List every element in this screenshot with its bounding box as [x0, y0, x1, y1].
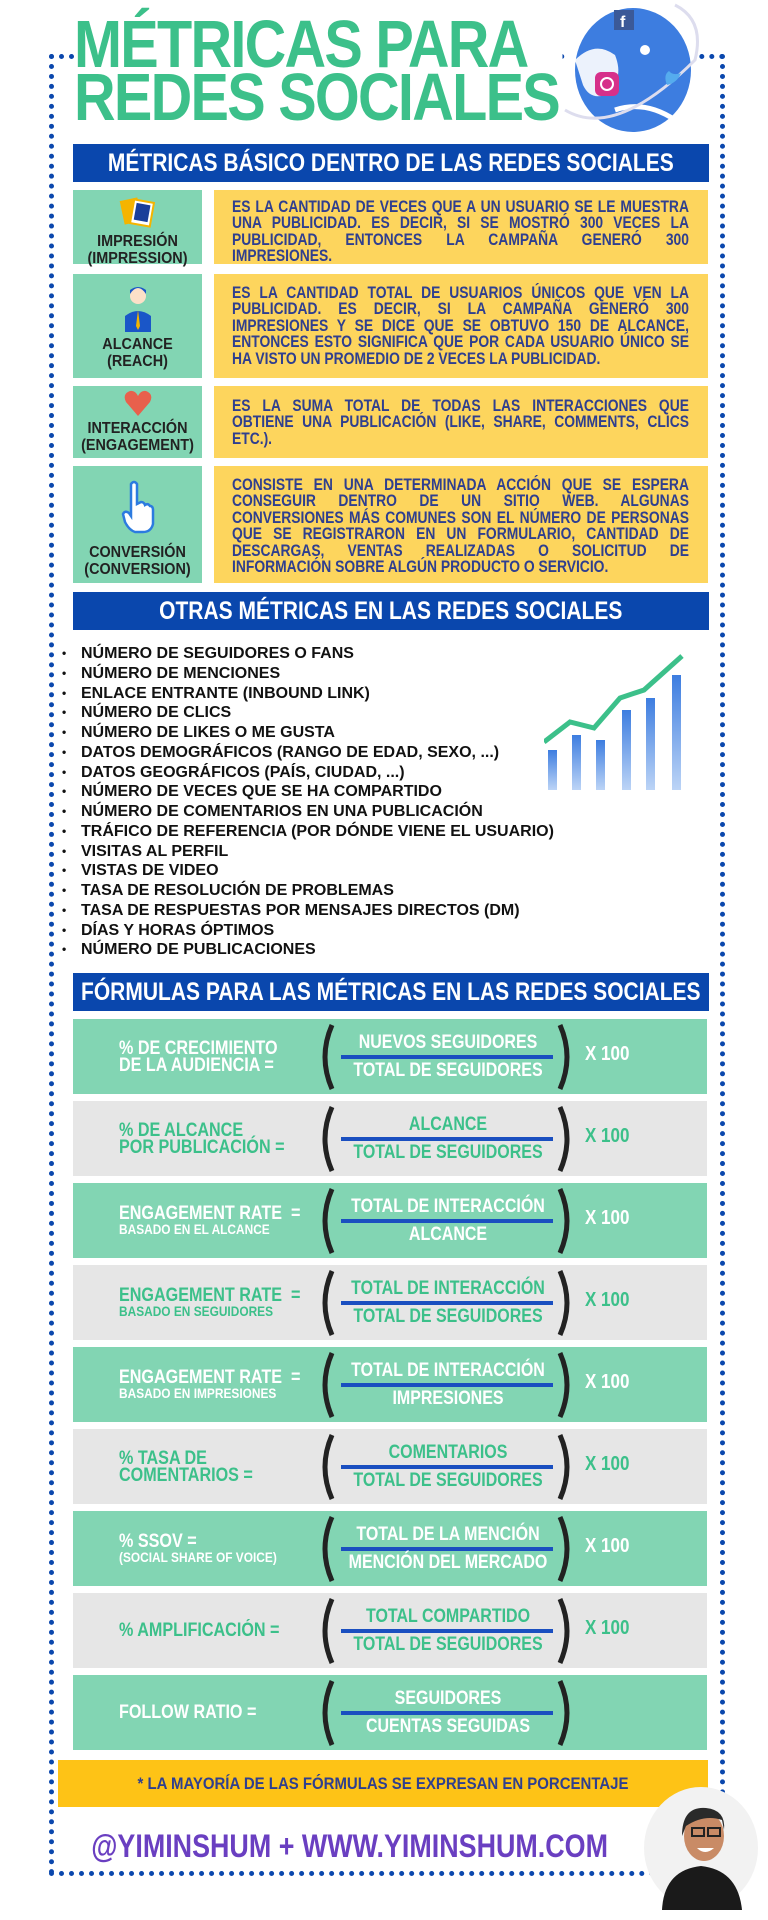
formula: follow ratio: FOLLOW RATIO =	[119, 1702, 256, 1723]
formula: follow ratio: CUENTAS SEGUIDAS	[366, 1715, 530, 1737]
formula: alcance por publicacion: X 100	[585, 1125, 629, 1147]
row: impresion label: (IMPRESSION)	[87, 250, 188, 267]
formula: engagement impresiones: BASADO EN IMPRESIONES	[119, 1385, 276, 1401]
formula: ssov: MENCIÓN DEL MERCADO	[349, 1551, 547, 1573]
formula: amplificacion	[73, 1593, 707, 1668]
row: interaccion label: INTERACCIÓN	[87, 420, 187, 437]
list: other metrics: NÚMERO DE CLICS	[81, 704, 231, 721]
formula: engagement impresiones: ENGAGEMENT RATE =	[119, 1367, 300, 1388]
list: other metrics: DATOS DEMOGRÁFICOS (RANGO DE EDAD, SEXO, ...)	[81, 744, 499, 761]
row: alcance label: ALCANCE	[102, 336, 173, 353]
list: other metrics: NÚMERO DE PUBLICACIONES	[81, 941, 316, 958]
formula: alcance por publicacion: POR PUBLICACIÓN =	[119, 1136, 285, 1158]
list: other metrics: NÚMERO DE LIKES O ME GUSTA	[81, 724, 335, 741]
list: other metrics: NÚMERO DE COMENTARIOS EN UNA PUBLICACIÓN	[81, 803, 483, 820]
formula: engagement alcance: ALCANCE	[409, 1223, 487, 1245]
list: other metrics: NÚMERO DE VECES QUE SE HA COMPARTIDO	[81, 783, 442, 800]
text: impresion: ES LA CANTIDAD DE VECES QUE A UN USUARIO SE LE MUESTRA UNA PUBLICIDAD. ES DECIR, SI SE MOSTRÓ 300 VECES LA PUBLICIDAD, ENTONCES LA CAMPAÑA GENERÓ 300 IMPRESIONES.	[232, 198, 689, 264]
formula: crecimiento audiencia: TOTAL DE SEGUIDORES	[353, 1059, 543, 1081]
formula: crecimiento audiencia: DE LA AUDIENCIA =	[119, 1054, 274, 1076]
list: other metrics	[62, 644, 554, 958]
row: conversion label	[73, 466, 202, 583]
formula: engagement alcance: BASADO EN EL ALCANCE	[119, 1221, 270, 1237]
footnote bar	[58, 1760, 708, 1807]
list: other metrics: TASA DE RESPUESTAS POR MENSAJES DIRECTOS (DM)	[81, 902, 520, 919]
header: other metrics: OTRAS MÉTRICAS EN LAS REDES SOCIALES	[159, 597, 623, 625]
formula: engagement alcance: X 100	[585, 1207, 629, 1229]
formula: amplificacion: TOTAL DE SEGUIDORES	[353, 1633, 543, 1655]
formula: engagement seguidores: TOTAL DE INTERACCIÓN	[351, 1277, 545, 1299]
formula: crecimiento audiencia: X 100	[585, 1043, 629, 1065]
icon: globe with social logos	[564, 4, 699, 132]
title: REDES SOCIALES	[74, 60, 559, 135]
formula: engagement alcance: TOTAL DE INTERACCIÓN	[351, 1195, 545, 1217]
list: other metrics: TASA DE RESOLUCIÓN DE PROBLEMAS	[81, 882, 394, 899]
list: other metrics: ENLACE ENTRANTE (INBOUND LINK)	[81, 684, 370, 702]
formula: amplificacion: % AMPLIFICACIÓN =	[119, 1620, 279, 1641]
title: MÉTRICAS PARA	[74, 7, 528, 82]
icon: author photo	[644, 1787, 758, 1910]
formula: tasa comentarios	[73, 1429, 707, 1504]
text: conversion: CONSISTE EN UNA DETERMINADA ACCIÓN QUE SE ESPERA CONSEGUIR DENTRO DE UN SITIO WEB. ALGUNAS CONVERSIONES MÁS COMUNES SON EL NÚMERO DE PERSONAS QUE SE REGISTRARON EN UN FORMULARIO, CANTIDAD DE DESCARGAS, VENTAS REALIZADAS O SOLICITUD DE INFORMACIÓN SOBRE ALGÚN PRODUCTO O SERVICIO.	[232, 476, 689, 576]
formula: engagement seguidores: TOTAL DE SEGUIDORES	[353, 1305, 543, 1327]
text: alcance: ES LA CANTIDAD TOTAL DE USUARIOS ÚNICOS QUE VEN LA PUBLICIDAD. ES DECIR, SI LA CAMPAÑA GENERÓ 300 IMPRESIONES Y SE DICE QUE SE OBTUVO 150 DE ALCANCE, ENTONCES ESTO SIGNIFICA QUE POR CADA USUARIO ÚNICO SE HA VISTO UN PROMEDIO DE 2 VECES LA PUBLICIDAD.	[232, 284, 689, 368]
formula: alcance por publicacion	[73, 1101, 707, 1176]
formula: engagement alcance	[73, 1183, 707, 1258]
formula: follow ratio	[73, 1675, 707, 1750]
row: impresion label	[73, 190, 202, 264]
formula: ssov: X 100	[585, 1535, 629, 1557]
formula: tasa comentarios: TOTAL DE SEGUIDORES	[353, 1469, 543, 1491]
title	[74, 18, 562, 124]
row: conversion label: CONVERSIÓN	[89, 544, 186, 561]
formula: crecimiento audiencia: % DE CRECIMIENTO	[119, 1038, 278, 1058]
formula: crecimiento audiencia	[73, 1019, 707, 1094]
list: other metrics: VISITAS AL PERFIL	[81, 842, 228, 860]
list: other metrics: NÚMERO DE MENCIONES	[81, 665, 280, 682]
formula: amplificacion: X 100	[585, 1617, 629, 1639]
formula: amplificacion: TOTAL COMPARTIDO	[366, 1605, 530, 1627]
formula: tasa comentarios: % TASA DE	[119, 1448, 207, 1468]
row: interaccion label: (ENGAGEMENT)	[81, 437, 194, 454]
formula: tasa comentarios: COMENTARIOS =	[119, 1464, 253, 1486]
list: other metrics: DÍAS Y HORAS ÓPTIMOS	[81, 922, 274, 938]
formula: alcance por publicacion: TOTAL DE SEGUIDORES	[353, 1141, 543, 1163]
formula: ssov: % SSOV =	[119, 1531, 197, 1552]
formula: engagement impresiones: TOTAL DE INTERACCIÓN	[351, 1359, 545, 1381]
text: interaccion	[214, 386, 708, 458]
footer: handle and website: @YIMINSHUM + WWW.YIMINSHUM.COM	[92, 1828, 608, 1864]
header: basic metrics	[73, 144, 709, 182]
list: other metrics: NÚMERO DE SEGUIDORES O FANS	[81, 645, 354, 662]
formula: alcance por publicacion: ALCANCE	[409, 1113, 487, 1135]
header: other metrics	[73, 592, 709, 630]
formula: ssov	[73, 1511, 707, 1586]
formula: engagement seguidores: BASADO EN SEGUIDORES	[119, 1303, 273, 1319]
text: interaccion: ES LA SUMA TOTAL DE TODAS LAS INTERACCIONES QUE OBTIENE UNA PUBLICACIÓN (LIKE, SHARE, COMMENTS, CLICS ETC.).	[232, 397, 689, 448]
chart: growth bars	[544, 654, 684, 790]
formula: tasa comentarios: X 100	[585, 1453, 629, 1475]
list: other metrics: VISTAS DE VIDEO	[81, 862, 219, 879]
header: basic metrics: MÉTRICAS BÁSICO DENTRO DE LAS REDES SOCIALES	[108, 149, 674, 177]
list: other metrics: DATOS GEOGRÁFICOS (PAÍS, CIUDAD, ...)	[81, 764, 405, 780]
icon: globe with social logos: f	[620, 14, 626, 31]
formula: engagement seguidores	[73, 1265, 707, 1340]
formula: tasa comentarios: COMENTARIOS	[389, 1441, 507, 1463]
row: alcance label: (REACH)	[107, 353, 168, 370]
formula: engagement alcance: ENGAGEMENT RATE =	[119, 1203, 300, 1224]
formula: engagement seguidores: X 100	[585, 1289, 629, 1311]
row: alcance label	[73, 274, 202, 378]
row: impresion label: IMPRESIÓN	[97, 233, 178, 250]
formula: engagement seguidores: ENGAGEMENT RATE =	[119, 1285, 300, 1306]
formula: engagement impresiones: X 100	[585, 1371, 629, 1393]
formula: follow ratio: SEGUIDORES	[395, 1687, 501, 1709]
formula: ssov: (SOCIAL SHARE OF VOICE)	[119, 1549, 277, 1565]
formula: crecimiento audiencia: NUEVOS SEGUIDORES	[359, 1031, 537, 1053]
formula: ssov: TOTAL DE LA MENCIÓN	[356, 1523, 540, 1545]
header: formulas: FÓRMULAS PARA LAS MÉTRICAS EN LAS REDES SOCIALES	[81, 978, 701, 1006]
row: interaccion label	[73, 386, 202, 458]
footnote bar: * LA MAYORÍA DE LAS FÓRMULAS SE EXPRESAN EN PORCENTAJE	[138, 1774, 628, 1793]
formula: alcance por publicacion: % DE ALCANCE	[119, 1120, 243, 1140]
formula: engagement impresiones	[73, 1347, 707, 1422]
row: conversion label: (CONVERSION)	[84, 561, 191, 578]
formula: engagement impresiones: IMPRESIONES	[392, 1387, 504, 1409]
list: other metrics: TRÁFICO DE REFERENCIA (POR DÓNDE VIENE EL USUARIO)	[81, 823, 554, 840]
